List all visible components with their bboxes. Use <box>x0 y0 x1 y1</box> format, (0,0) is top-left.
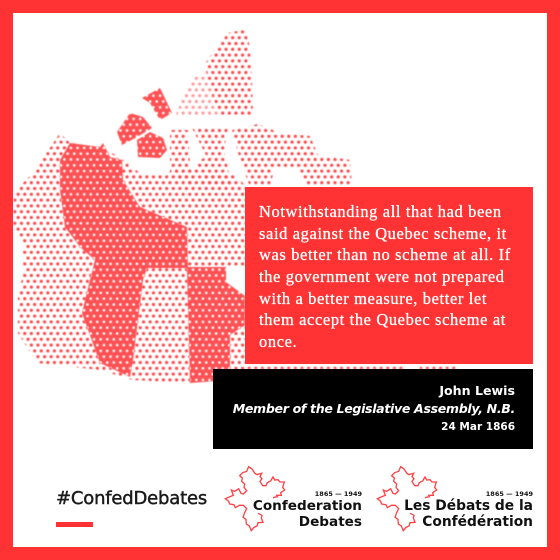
logo text: Confederation Debates: Confederation <box>253 498 362 514</box>
attribution panel <box>213 369 533 449</box>
icon: maple leaf outline, English logo <box>224 466 286 532</box>
hashtag underline <box>56 522 93 527</box>
quote text: them accept the Quebec scheme at <box>259 310 506 329</box>
hashtag: #ConfedDebates <box>56 488 207 509</box>
logo text: Confederation Debates <box>253 490 362 530</box>
logo text: Les Débats de la Confédération: 1865 — 1949 <box>486 490 533 498</box>
quote panel <box>245 187 533 364</box>
dark regions of the map <box>60 88 245 383</box>
attribution text: 24 Mar 1866 <box>441 421 515 433</box>
logo text: Confederation Debates: 1865 — 1949 <box>315 490 362 498</box>
quote text: was better than no scheme at all. If <box>259 245 511 264</box>
white gap beside the quote box <box>188 266 245 296</box>
attribution text: Member of the Legislative Assembly, N.B. <box>233 401 515 416</box>
quote text: Notwithstanding all that had been <box>259 202 502 221</box>
icon: maple leaf outline, French logo <box>376 466 438 532</box>
attribution text: John Lewis <box>439 383 515 398</box>
quote text: with a better measure, better let <box>259 289 487 308</box>
quote text <box>258 202 511 351</box>
logo text: Les Débats de la Confédération: Les Débats de la <box>404 498 533 514</box>
attribution text <box>233 383 515 433</box>
light regions of the map <box>13 29 457 383</box>
quote text: the government were not prepared <box>259 267 505 286</box>
logo text: Les Débats de la Confédération: Confédération <box>422 514 533 530</box>
quote text: once. <box>259 332 297 351</box>
logo text: Les Débats de la Confédération <box>404 490 533 530</box>
logo text: Confederation Debates: Debates <box>299 514 362 530</box>
quote text: said against the Quebec scheme, it <box>259 224 507 243</box>
